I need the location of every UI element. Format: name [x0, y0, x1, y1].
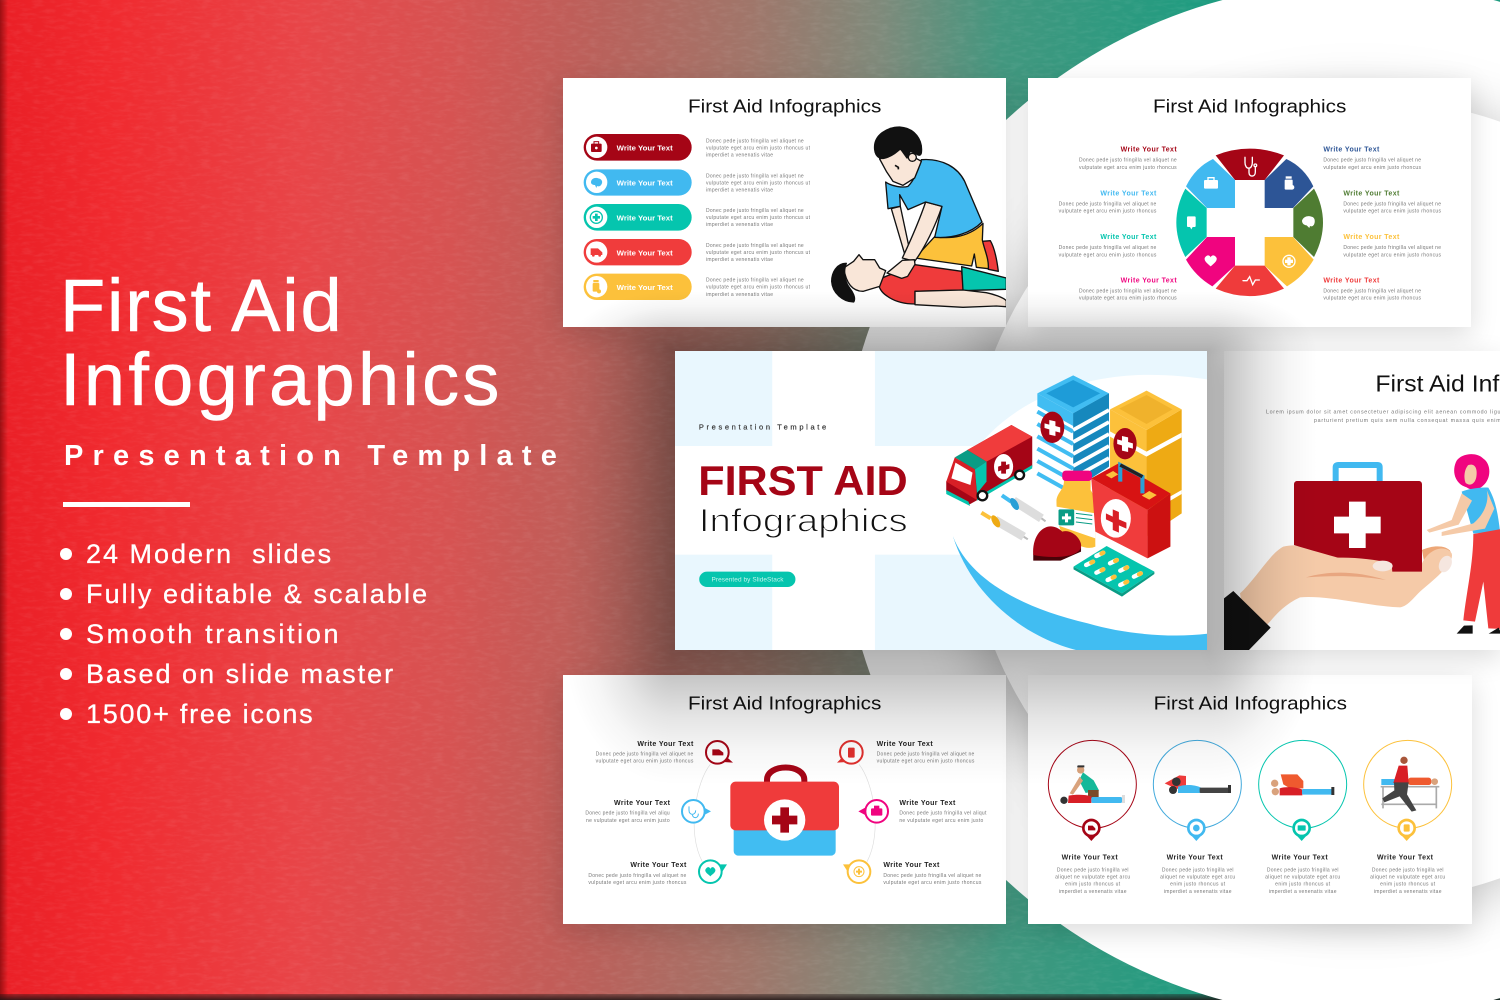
- feature list: [60, 539, 429, 729]
- right column labels: vulputate eget arcu enim justo rhoncus: [1323, 165, 1422, 171]
- right column labels: Donec pede justo fringilla vel aliquet ne: [1343, 245, 1441, 251]
- callout text: Donec pede justo fringilla vel aliquet ne: [883, 873, 982, 879]
- list pills: Write Your Text: [617, 285, 673, 292]
- callout text: Donec pede justo fringilla vel aliqut: [899, 811, 987, 817]
- title: FIRST AID: FIRST AID: [698, 458, 908, 505]
- step text: enim justo rhoncus ut: [1380, 882, 1436, 888]
- step text: Donec pede justo fringilla vel: [1057, 867, 1129, 873]
- feature list: 24 Modern slides: [86, 539, 333, 569]
- callout text: vulputate eget arcu enim justo rhoncus: [877, 759, 975, 765]
- callout text: Write Your Text: [899, 800, 956, 807]
- illustration: CPR: [832, 127, 1006, 307]
- step text: imperdiet a venenatis vitae: [1059, 889, 1127, 895]
- callout text: Donec pede justo fringilla vel aliquet ne: [596, 752, 694, 758]
- panel: center title slide: [675, 351, 1207, 650]
- step text: aliquet ne vulputate eget arcu: [1055, 875, 1130, 881]
- step text: Write Your Text: [1377, 855, 1434, 862]
- feature list: Smooth transition: [86, 619, 341, 649]
- right column labels: Write Your Text: [1343, 234, 1400, 241]
- left column labels: Donec pede justo fringilla vel aliquet ne: [1079, 288, 1177, 294]
- left column labels: Write Your Text: [1121, 147, 1177, 154]
- right column labels: [1323, 147, 1442, 302]
- feature list: Fully editable & scalable: [86, 579, 429, 609]
- list descriptions: Donec pede justo fringilla vel aliquet ne: [706, 138, 804, 144]
- intro text: Lorem ipsum dolor sit amet consectetuer adipiscing elit aenean commodo ligula: [1266, 409, 1500, 415]
- step 3: circle and recovery figure: [1259, 740, 1347, 841]
- bottle: [1056, 471, 1095, 548]
- panel: slide with CPR list: [563, 78, 1006, 327]
- panel: slide with four rescue steps: [1028, 675, 1472, 924]
- illustration: hand holding case: [1224, 465, 1454, 651]
- panel: slide with wheel diagram: [1028, 78, 1471, 327]
- list pills: Write Your Text: [617, 181, 673, 188]
- step text: Write Your Text: [1167, 855, 1223, 862]
- step text: imperdiet a venenatis vitae: [1164, 889, 1232, 895]
- list descriptions: vulputate eget arcu enim justo rhoncus ut: [706, 215, 811, 221]
- callout text: Write Your Text: [877, 741, 933, 748]
- callout text: Write Your Text: [630, 862, 687, 869]
- step text: enim justo rhoncus ut: [1065, 882, 1121, 888]
- connecting arcs: [694, 764, 875, 862]
- callout text: vulputate eget arcu enim justo rhoncus: [596, 759, 694, 765]
- step text: imperdiet a venenatis vitae: [1374, 889, 1442, 895]
- left column labels: [1059, 147, 1177, 302]
- feature list: Based on slide master: [86, 659, 395, 689]
- subheading: Presentation Template: [64, 440, 566, 472]
- list pills: Write Your Text: [617, 250, 673, 257]
- step text: Donec pede justo fringilla vel: [1372, 867, 1444, 873]
- callout text: vulputate eget arcu enim justo rhoncus: [883, 880, 982, 886]
- step 1: circle and CPR figure: [1048, 740, 1136, 841]
- heart: [1033, 526, 1081, 561]
- first aid kit: [1091, 463, 1170, 558]
- blue building: [1037, 375, 1109, 507]
- list descriptions: Donec pede justo fringilla vel aliquet ne: [706, 173, 804, 179]
- heading: First Aid: First Aid: [60, 264, 343, 347]
- left column labels: Donec pede justo fringilla vel aliquet ne: [1079, 158, 1177, 164]
- step text: aliquet ne vulputate eget arcu: [1370, 875, 1445, 881]
- callout text: ne vulputate eget arcu enim justo: [586, 818, 670, 824]
- right column labels: vulputate eget arcu enim justo rhoncus: [1343, 252, 1442, 258]
- list descriptions: imperdiet a venenatis vitae: [706, 257, 773, 263]
- feature list: 1500+ free icons: [86, 699, 314, 729]
- slide title: First Aid Infographics: [1154, 692, 1347, 713]
- step text: Write Your Text: [1272, 855, 1328, 862]
- callout text: Write Your Text: [883, 862, 940, 869]
- list descriptions: vulputate eget arcu enim justo rhoncus ut: [706, 180, 811, 186]
- divider bar: [63, 502, 190, 507]
- intro text: [1266, 409, 1500, 424]
- list descriptions: vulputate eget arcu enim justo rhoncus ut: [706, 285, 811, 291]
- list descriptions: vulputate eget arcu enim justo rhoncus ut: [706, 250, 811, 256]
- list descriptions: imperdiet a venenatis vitae: [706, 222, 773, 228]
- right column labels: Donec pede justo fringilla vel aliquet ne: [1343, 201, 1441, 207]
- left column labels: Write Your Text: [1100, 190, 1157, 197]
- left column labels: Donec pede justo fringilla vel aliquet ne: [1059, 245, 1157, 251]
- list pills: [584, 134, 692, 300]
- step text: [1055, 855, 1445, 895]
- right column labels: Donec pede justo fringilla vel aliquet ne: [1323, 158, 1421, 164]
- presenter pill: [699, 572, 795, 587]
- step text: aliquet ne vulputate eget arcu: [1265, 875, 1340, 881]
- step text: Donec pede justo fringilla vel: [1267, 867, 1339, 873]
- slide title: First Aid Infographics: [688, 692, 881, 713]
- callout text: Write Your Text: [614, 800, 671, 807]
- subtitle: Presentation Template: [699, 422, 826, 431]
- right column labels: Write Your Text: [1343, 190, 1400, 197]
- list descriptions: Donec pede justo fringilla vel aliquet ne: [706, 278, 804, 284]
- step text: imperdiet a venenatis vitae: [1269, 889, 1337, 895]
- blue crescent and white ellipse: [951, 375, 1211, 652]
- panel: slide with case and callouts: [563, 675, 1006, 924]
- list descriptions: Donec pede justo fringilla vel aliquet ne: [706, 243, 804, 249]
- list pills: Write Your Text: [617, 146, 673, 153]
- left column labels: Write Your Text: [1100, 234, 1157, 241]
- callout text: Donec pede justo fringilla vel aliqu: [585, 811, 670, 817]
- list descriptions: [706, 138, 811, 298]
- step text: enim justo rhoncus ut: [1170, 882, 1226, 888]
- blister pack: [1074, 546, 1154, 597]
- callout icons: [682, 741, 888, 883]
- step text: Donec pede justo fringilla vel: [1162, 867, 1234, 873]
- panel: slide with hand and case, cut off at right edge: [1224, 351, 1500, 650]
- list descriptions: imperdiet a venenatis vitae: [706, 187, 773, 193]
- callout text: Donec pede justo fringilla vel aliquet ne: [588, 873, 687, 879]
- list pills: Write Your Text: [617, 215, 673, 222]
- ambulance: [946, 425, 1032, 506]
- intro text: parturient pretium quis sem nulla consequat massa quis enim: [1314, 418, 1500, 424]
- step text: Write Your Text: [1062, 855, 1118, 862]
- left column labels: Write Your Text: [1121, 278, 1177, 285]
- slide title: First Aid Infographics: [688, 95, 881, 116]
- right column labels: vulputate eget arcu enim justo rhoncus: [1343, 209, 1442, 215]
- right column labels: Write Your Text: [1323, 278, 1380, 285]
- callout text: vulputate eget arcu enim justo rhoncus: [588, 880, 687, 886]
- step 4: circle and stretcher figure: [1364, 740, 1452, 841]
- right column labels: vulputate eget arcu enim justo rhoncus: [1323, 296, 1422, 302]
- illustration: isometric medical kit: [946, 375, 1182, 597]
- callout text: Write Your Text: [637, 741, 694, 748]
- slide background quadrants: [675, 350, 1213, 655]
- illustration: woman: [1427, 454, 1500, 634]
- callout text: Donec pede justo fringilla vel aliquet ne: [877, 752, 975, 758]
- left column labels: vulputate eget arcu enim justo rhoncus: [1079, 165, 1177, 171]
- step 2: circle and breathing figure: [1153, 740, 1241, 841]
- list descriptions: imperdiet a venenatis vitae: [706, 152, 773, 158]
- slide title: First Aid Infographics: [1153, 95, 1346, 116]
- left column labels: vulputate eget arcu enim justo rhoncus: [1079, 296, 1177, 302]
- right column labels: Donec pede justo fringilla vel aliquet ne: [1323, 288, 1421, 294]
- list descriptions: Donec pede justo fringilla vel aliquet ne: [706, 208, 804, 214]
- callout text: [585, 741, 987, 886]
- callout text: ne vulputate eget arcu enim justo: [899, 818, 984, 824]
- title: Infographics: Infographics: [699, 503, 908, 539]
- left column labels: Donec pede justo fringilla vel aliquet ne: [1059, 201, 1157, 207]
- list descriptions: imperdiet a venenatis vitae: [706, 292, 773, 298]
- left column labels: vulputate eget arcu enim justo rhoncus: [1059, 252, 1157, 258]
- first aid case: [730, 768, 839, 856]
- list descriptions: vulputate eget arcu enim justo rhoncus ut: [706, 145, 811, 151]
- syringes: [981, 495, 1046, 539]
- left column labels: vulputate eget arcu enim justo rhoncus: [1059, 209, 1157, 215]
- wheel diagram: [1176, 149, 1323, 296]
- right column labels: Write Your Text: [1323, 147, 1380, 154]
- step text: enim justo rhoncus ut: [1275, 882, 1331, 888]
- heading: Infographics: Infographics: [60, 338, 503, 421]
- step text: aliquet ne vulputate eget arcu: [1160, 875, 1235, 881]
- presenter pill: Presented by SlideStack: [712, 576, 784, 583]
- yellow building: [1110, 391, 1182, 550]
